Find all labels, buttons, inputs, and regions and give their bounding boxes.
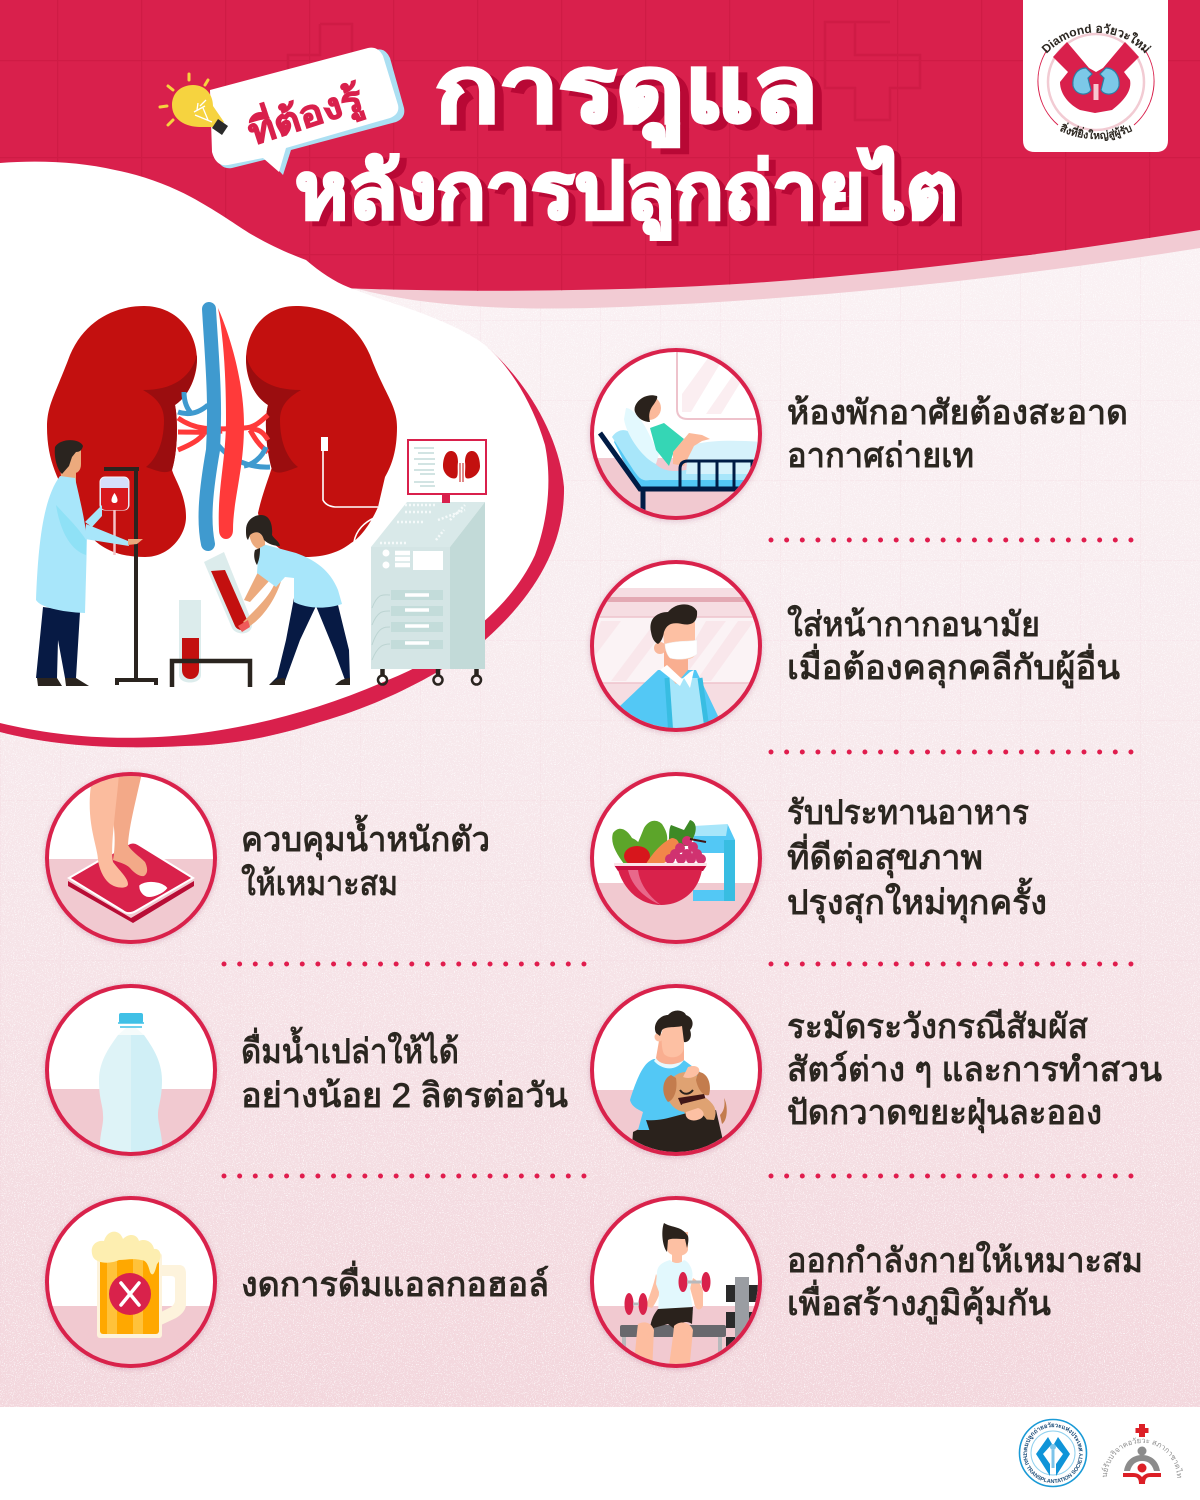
- logo: Thai Transplantation Society: สมาคมปลูกถ่ายอวัยวะแห่งประเทศไทย: [1024, 1422, 1083, 1454]
- icon: feet on scale: [41, 773, 221, 949]
- text: เมื่อต้องคลุกคลีกับผู้อื่น: [787, 644, 1120, 688]
- text: [787, 605, 1120, 688]
- test tube: [179, 600, 201, 682]
- text: ดื่มน้ำเปล่าให้ได้: [241, 1027, 459, 1071]
- icon: light bulb: [160, 74, 228, 135]
- dotted dividers: [224, 540, 1137, 1176]
- icon: man in face mask: [586, 562, 766, 738]
- item: clean room: [586, 344, 1128, 528]
- item: wear a mask: [586, 562, 1120, 738]
- illustration: kidney transplant team: [36, 306, 486, 687]
- text: [241, 1027, 568, 1115]
- text: ที่ดีต่อสุขภาพ: [787, 834, 983, 878]
- renal vessels: [178, 308, 270, 544]
- item: drink water: [41, 986, 568, 1159]
- item: healthy food: [586, 774, 1047, 953]
- drip stand: [104, 469, 156, 685]
- left kidney: [47, 306, 197, 557]
- angled blood tube: [204, 552, 252, 633]
- tube rack: [172, 661, 250, 687]
- footer band: [0, 1407, 1200, 1500]
- text: ปรุงสุกใหม่ทุกครั้ง: [787, 878, 1047, 923]
- icon: man with dog: [586, 986, 766, 1160]
- doctor with coat: [36, 440, 143, 686]
- text: [787, 1008, 1162, 1133]
- title line 1: การดูแล: [435, 39, 818, 147]
- text: ปัดกวาดขยะฝุ่นละออง: [787, 1094, 1102, 1133]
- text: [241, 815, 490, 903]
- item: animal contact and gardening: [586, 986, 1162, 1160]
- logo card: Diamond: สิ่งที่ยิ่งใหญ่สู่ผู้รับ: [1060, 122, 1132, 141]
- title line 2: หลังการปลูกถ่ายไต: [295, 146, 958, 240]
- text: ให้เหมาะสม: [241, 864, 398, 903]
- item: exercise: [586, 1198, 1143, 1377]
- text: สัตว์ต่าง ๆ และการทำสวน: [787, 1051, 1162, 1089]
- dialysis machine: [371, 502, 485, 684]
- icon: patient in bed: [586, 344, 766, 528]
- text: [787, 794, 1047, 923]
- text: รับประทานอาหาร: [787, 794, 1029, 832]
- item: control weight: [41, 773, 490, 949]
- icon: man lifting dumbbells: [586, 1198, 766, 1377]
- text: [787, 1241, 1143, 1324]
- logo card: Diamond: Diamond อวัยวะใหม่: [1041, 24, 1152, 54]
- catheter line: [323, 450, 378, 542]
- logo: Thai Transplantation Society: THAI TRANSPLANTATION SOCIETY: [1023, 1452, 1083, 1483]
- text: งดการดื่มแอลกอฮอล์: [241, 1261, 549, 1304]
- logo card: Diamond: [1023, 0, 1168, 152]
- callout bubble: ที่ต้องรู้: [210, 48, 404, 175]
- text: อากาศถ่ายเท: [787, 437, 974, 475]
- item: no alcohol: [41, 1198, 549, 1376]
- text: อย่างน้อย 2 ลิตรต่อวัน: [241, 1077, 568, 1115]
- icon: beer mug with cross: [41, 1198, 221, 1376]
- title line 1: การดูแล: [444, 45, 827, 153]
- nurse: [238, 515, 350, 685]
- text: ใส่หน้ากากอนามัย: [787, 605, 1040, 644]
- text: ออกกำลังกายให้เหมาะสม: [787, 1241, 1143, 1280]
- machine wheels: [378, 669, 481, 684]
- text: ระมัดระวังกรณีสัมผัส: [787, 1008, 1088, 1046]
- text: เพื่อสร้างภูมิคุ้มกัน: [787, 1280, 1051, 1324]
- blood bag: [100, 477, 129, 555]
- title line 2: หลังการปลูกถ่ายไต: [302, 151, 965, 245]
- white blob with red rim holding the illustration: [0, 162, 564, 747]
- text: [787, 394, 1128, 475]
- text: ห้องพักอาศัยต้องสะอาด: [787, 394, 1128, 432]
- logo: Red Cross organ donation centre: ศูนย์รับบริจาคอวัยวะ สภากาชาดไทย: [1102, 1438, 1183, 1478]
- icon: vegetable bowl and milk carton: [586, 774, 766, 953]
- catheter connector: [321, 437, 328, 451]
- callout bubble: ที่ต้องรู้: ที่ต้องรู้: [241, 72, 369, 156]
- right kidney: [246, 306, 397, 557]
- monitor with kidney image: [408, 440, 486, 503]
- text: ควบคุมน้ำหนักตัว: [241, 815, 490, 860]
- icon: water bottle: [41, 986, 221, 1159]
- header banner: [0, 0, 1200, 308]
